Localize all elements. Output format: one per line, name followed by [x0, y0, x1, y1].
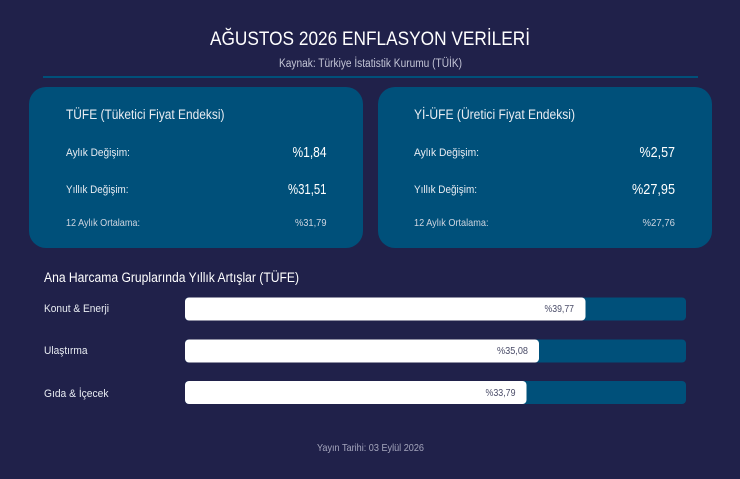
footer: publication date: Yayın Tarihi: 03 Eylül 2026	[317, 442, 424, 454]
annual change label: Yıllık Değişim:	[66, 184, 128, 196]
section heading: Ana Harcama Gruplarında Yıllık Artışlar (TÜFE)	[44, 270, 299, 285]
subtitle: source: Kaynak: Türkiye İstatistik Kurumu (TÜİK)	[279, 57, 462, 70]
bar row: Ulaştırma	[44, 340, 686, 362]
annual change label: Yıllık Değişim:	[414, 184, 477, 196]
bar chart	[44, 298, 686, 404]
bar row: Gıda & İçecek: Gıda & İçecek	[44, 387, 109, 400]
title: AĞUSTOS 2026 ENFLASYON VERİLERİ	[210, 27, 530, 50]
12-month average value: %27,76	[642, 217, 675, 229]
12-month average label: 12 Aylık Ortalama:	[414, 217, 488, 229]
monthly change value: %2,57	[640, 145, 675, 161]
monthly change label: Aylık Değişim:	[66, 147, 130, 159]
panel: Yİ-ÜFE	[378, 87, 712, 248]
12-month average label: 12 Aylık Ortalama:	[66, 217, 140, 229]
panel heading: TÜFE: TÜFE (Tüketici Fiyat Endeksi)	[66, 107, 224, 122]
panel heading: Yİ-ÜFE: Yİ-ÜFE (Üretici Fiyat Endeksi)	[414, 107, 575, 122]
monthly change value: %1,84	[292, 145, 326, 161]
bar row: Gıda & İçecek: %33,79	[486, 388, 516, 399]
annual change value: %31,51	[288, 182, 326, 198]
12-month average value: %31,79	[295, 217, 327, 229]
annual change value: %27,95	[632, 182, 675, 198]
monthly change label: Aylık Değişim:	[414, 147, 479, 159]
header	[43, 27, 698, 78]
bar row: Konut & Enerji: %39,77	[544, 304, 574, 315]
bar row: Konut & Enerji	[44, 298, 686, 320]
bar row: Gıda & İçecek	[44, 381, 686, 404]
panel: TÜFE	[29, 87, 363, 248]
bar row: Ulaştırma: %35,08	[497, 346, 528, 357]
bar row: Ulaştırma: Ulaştırma	[44, 345, 88, 357]
bar row: Konut & Enerji: Konut & Enerji	[44, 303, 109, 315]
